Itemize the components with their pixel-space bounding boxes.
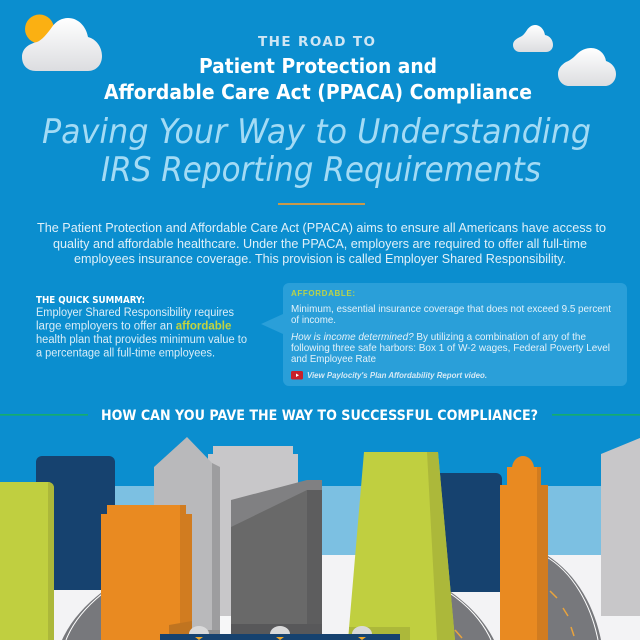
road: right curve: [540, 551, 601, 640]
road edge navy bar: [160, 634, 400, 640]
road: inner curve: [440, 590, 494, 640]
subtitle line 1: Paving Your Way to Understanding: [42, 112, 591, 152]
building: light gray tower: [208, 446, 298, 634]
subtitle line 2: IRS Reporting Requirements: [101, 150, 541, 190]
panel: affordable callout: [261, 283, 627, 386]
title block: [42, 34, 591, 190]
building: orange center: [101, 505, 192, 640]
building: navy left: [36, 456, 115, 590]
orange rule: [278, 203, 365, 205]
horizon and ground: [0, 486, 640, 555]
video link: View Paylocity's Plan Affordability Report video.: [307, 371, 487, 380]
building: light gray right: [601, 438, 640, 616]
icon: large cloud: [22, 18, 102, 71]
callout definition: of income.: [291, 314, 336, 326]
building: green tapered tower: [348, 452, 455, 640]
callout definition: following three safe harbors: Box 1 of W-2 wages, Federal Poverty Level: [291, 342, 610, 354]
quick summary text: large employers to offer an affordable: [36, 320, 231, 332]
building: gray peaked tower: [154, 437, 220, 634]
quick summary text: a percentage all full-time employees.: [36, 348, 215, 360]
section heading: HOW CAN YOU PAVE THE WAY TO SUCCESSFUL COMPLIANCE?: [101, 408, 538, 424]
title line 2: Affordable Care Act (PPACA) Compliance: [104, 80, 532, 104]
icon: sun behind cloud: [25, 14, 54, 44]
title line 1: Patient Protection and: [199, 54, 437, 78]
white gap: [220, 616, 231, 634]
street lamps: [189, 626, 372, 640]
eyebrow: the road to: THE ROAD TO: [258, 34, 375, 50]
building: orange clock tower: [500, 456, 548, 640]
icon: small cloud: [513, 25, 553, 52]
icon: medium cloud: [558, 48, 616, 86]
icon: video play: [291, 371, 303, 380]
building: green left: [0, 482, 54, 640]
quick summary text: health plan that provides minimum value to: [36, 334, 247, 346]
callout definition: How is income determined? By utilizing a combination of any of the: [291, 331, 586, 343]
intro paragraph: quality and affordable healthcare. Under the PPACA, employers are required to offer all full-time: [53, 236, 587, 251]
callout definition: Minimum, essential insurance coverage that does not exceed 9.5 percent: [291, 303, 611, 315]
city skyline illustration: [0, 437, 640, 640]
building: navy right: [440, 473, 502, 592]
building: dark gray tower: [231, 480, 322, 634]
callout definition: [291, 303, 611, 365]
quick summary text: [36, 295, 247, 360]
quick summary text: Employer Shared Responsibility requires: [36, 307, 234, 319]
quick summary text: THE QUICK SUMMARY:: [36, 295, 145, 306]
callout heading: AFFORDABLE:: [291, 289, 355, 298]
intro paragraph: The Patient Protection and Affordable Care Act (PPACA) aims to ensure all Americans have access to: [37, 220, 606, 235]
callout definition: and Employee Rate: [291, 353, 376, 365]
road: left curve: [62, 592, 120, 640]
intro paragraph: employees insurance coverage. This provision is called Employer Shared Responsibility.: [74, 251, 566, 266]
intro paragraph: [37, 220, 606, 266]
